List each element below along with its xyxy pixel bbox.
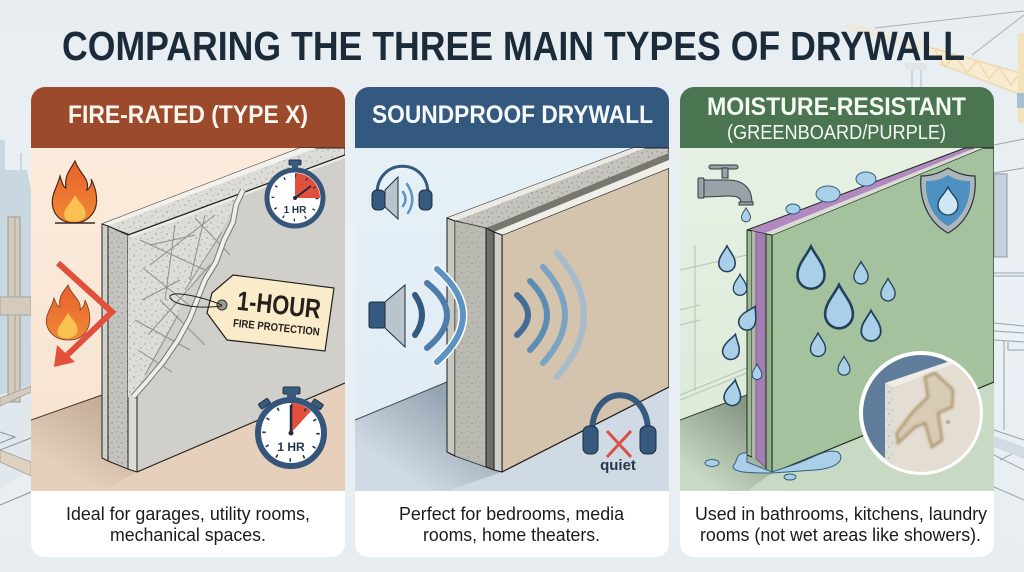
- icon: quiet headphones: quiet: [600, 457, 636, 474]
- icon: stopwatch bottom: [258, 387, 324, 466]
- header: soundproof: [355, 87, 669, 148]
- wall board: soundproof: [447, 148, 669, 472]
- caption: moisture-resistant: [695, 504, 987, 545]
- callout tag: 1-hour fire protection: [170, 275, 334, 351]
- heading: fire-rated: FIRE-RATED (TYPE X): [68, 101, 308, 129]
- water drops: [719, 208, 895, 407]
- caption: soundproof: Perfect for bedrooms, media: [399, 504, 625, 524]
- floor: fire panel: [31, 383, 345, 491]
- caption: moisture-resistant: rooms (not wet areas like showers).: [700, 525, 981, 545]
- icon: water shield: [921, 168, 975, 233]
- caption: soundproof: [400, 506, 624, 544]
- header: fire-rated: [31, 87, 345, 148]
- icon: stopwatch bottom: 1 HR: [277, 440, 305, 454]
- icon: faucet: [698, 165, 753, 205]
- icon: flame with deflection arrow: [46, 263, 112, 367]
- callout tag: 1-hour fire protection: FIRE PROTECTION: [232, 318, 320, 339]
- header: moisture-resistant: [680, 87, 994, 148]
- wall board: moisture-resistant: [747, 148, 994, 473]
- icon: stopwatch top: 1 HR: [284, 205, 307, 216]
- icon: headphones with speaker: [372, 166, 432, 219]
- panel: soundproof: [355, 87, 669, 557]
- icon: quiet headphones: [583, 395, 656, 474]
- caption: fire-rated: mechanical spaces.: [110, 525, 266, 545]
- floor: soundproof panel: [355, 382, 669, 491]
- wall board: fire-rated: [102, 148, 345, 472]
- heading: soundproof: SOUNDPROOF DRYWALL: [372, 101, 653, 129]
- callout tag: 1-hour fire protection: 1-HOUR: [236, 286, 322, 324]
- heading: moisture-resistant: (GREENBOARD/PURPLE): [727, 122, 946, 144]
- floor: moisture panel: [680, 382, 994, 491]
- sound waves through the wall: [517, 253, 584, 377]
- exposed glass fibres: [135, 215, 230, 375]
- water beads on top edge: [786, 172, 876, 214]
- heading: moisture-resistant: MOISTURE-RESISTANT: [707, 93, 966, 121]
- panel: moisture-resistant: [680, 87, 994, 557]
- water puddle: [705, 451, 841, 480]
- caption: fire-rated: [66, 504, 310, 545]
- caption: soundproof: rooms, home theaters.: [423, 525, 600, 545]
- caption: fire-rated: Ideal for garages, utility rooms,: [66, 504, 310, 524]
- icon: flame top: [52, 161, 97, 223]
- icon: speaker: [369, 285, 405, 347]
- sound waves hitting the wall: [415, 269, 463, 362]
- heading: moisture-resistant: [707, 93, 966, 144]
- icon: stopwatch top: [267, 160, 323, 226]
- caption: moisture-resistant: Used in bathrooms, kitchens, laundry: [695, 504, 987, 524]
- inset: water damage on regular drywall: [861, 353, 990, 480]
- panel: fire-rated: [31, 87, 345, 557]
